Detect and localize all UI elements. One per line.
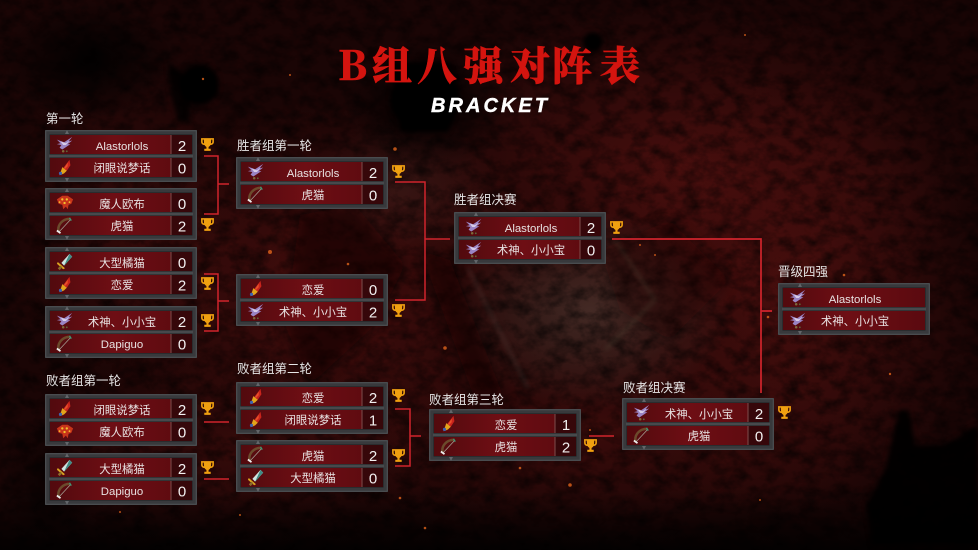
panel: winners final: 0 bbox=[587, 242, 595, 260]
panel: losers round 3: 恋爱 bbox=[495, 418, 517, 432]
panel: losers round 2 match 1: 闭眼说梦话 bbox=[285, 413, 341, 427]
panel: first round match 3 bbox=[45, 247, 197, 299]
heading: 晋级四强: 晋级四强 bbox=[778, 265, 829, 279]
panel: losers round 2 match 2: 大型橘猫 bbox=[290, 471, 336, 485]
panel: first round match 2: 2 bbox=[178, 218, 186, 236]
panel: winners round 1 match 1 bbox=[236, 157, 388, 209]
panel: losers round 2 match 1: 恋爱 bbox=[302, 391, 324, 405]
panel: winners round 1 match 2: 术神、小小宝 bbox=[279, 305, 347, 319]
panel: losers round 2 match 2: 虎猫 bbox=[302, 450, 324, 463]
panel: first round match 1: 2 bbox=[178, 138, 186, 155]
panel: top four: 术神、小小宝 bbox=[821, 314, 889, 328]
panel: losers round 3: 虎猫 bbox=[495, 441, 517, 454]
panel: winners final: 术神、小小宝 bbox=[497, 243, 565, 257]
panel: first round match 1 bbox=[45, 130, 197, 182]
panel: winners round 1 match 1: Alastorlols bbox=[287, 168, 340, 180]
panel: winners round 1 match 2 bbox=[236, 274, 388, 326]
panel: losers round 2 match 2 bbox=[236, 440, 388, 492]
panel: winners round 1 match 2: 0 bbox=[369, 282, 377, 299]
panel: first round match 2: 0 bbox=[178, 196, 186, 213]
subtitle: BRACKET bbox=[431, 95, 549, 117]
panel: losers final: 2 bbox=[755, 406, 763, 423]
panel: losers round 2 match 1 bbox=[236, 382, 388, 434]
panel: losers final bbox=[622, 398, 774, 450]
panel: losers round 1 match 2: Dapiguo bbox=[101, 486, 143, 498]
panel: losers round 2 match 1: 2 bbox=[369, 390, 377, 407]
panel: losers round 1 match 1: 闭眼说梦话 bbox=[94, 403, 150, 417]
panel: losers round 3 bbox=[429, 409, 581, 461]
panel: losers round 1 match 1 bbox=[45, 394, 197, 446]
panel: losers final: 虎猫 bbox=[688, 430, 710, 443]
panel: losers round 1 match 2: 大型橘猫 bbox=[99, 462, 145, 476]
panel: losers round 2 match 1: 1 bbox=[369, 412, 377, 430]
panel: winners round 1 match 1: 虎猫 bbox=[302, 189, 324, 202]
panel: first round match 3: 0 bbox=[178, 255, 186, 272]
panel: first round match 4 bbox=[45, 306, 197, 358]
panel: first round match 3: 2 bbox=[178, 278, 186, 294]
panel: losers final: 术神、小小宝 bbox=[665, 407, 733, 421]
panel: losers round 3: 2 bbox=[562, 440, 570, 456]
panel: first round match 4: Dapiguo bbox=[101, 339, 143, 351]
panel: first round match 1: 闭眼说梦话 bbox=[94, 161, 150, 175]
panel: first round match 1: 0 bbox=[178, 160, 186, 178]
panel: losers round 1 match 1: 魔人欧布 bbox=[99, 425, 145, 439]
panel: winners round 1 match 2: 恋爱 bbox=[302, 283, 324, 297]
panel: losers round 1 match 2 bbox=[45, 453, 197, 505]
panel: first round match 4: 术神、小小宝 bbox=[88, 315, 156, 329]
panel: first round match 3: 恋爱 bbox=[111, 278, 133, 292]
panel: winners final bbox=[454, 212, 606, 264]
panel: losers round 2 match 2: 2 bbox=[369, 448, 377, 465]
panel: first round match 4: 0 bbox=[178, 336, 186, 354]
panel: top four: Alastorlols bbox=[829, 294, 882, 306]
heading: 败者组第一轮: 败者组第一轮 bbox=[46, 373, 121, 388]
heading: 败者组决赛: 败者组决赛 bbox=[623, 380, 686, 395]
panel: losers round 3: 1 bbox=[562, 417, 570, 434]
heading: 败者组第二轮: 败者组第二轮 bbox=[237, 361, 312, 376]
panel: winners round 1 match 1: 2 bbox=[369, 165, 377, 182]
heading: 第一轮: 第一轮 bbox=[46, 112, 84, 126]
panel: losers round 1 match 2: 0 bbox=[178, 484, 186, 500]
panel: first round match 2: 魔人欧布 bbox=[99, 197, 145, 211]
panel: winners round 1 match 1: 0 bbox=[369, 188, 377, 204]
panel: first round match 2: 虎猫 bbox=[111, 220, 133, 233]
panel: first round match 2 bbox=[45, 188, 197, 240]
panel: top four bbox=[778, 283, 930, 335]
panel: first round match 4: 2 bbox=[178, 314, 186, 331]
panel: losers round 1 match 2: 2 bbox=[178, 461, 186, 478]
sparks bbox=[119, 34, 891, 529]
panel: first round match 3: 大型橘猫 bbox=[99, 256, 145, 270]
icons: winner trophies bbox=[201, 138, 791, 474]
panel: winners final: 2 bbox=[587, 220, 595, 237]
panel: losers round 1 match 1: 2 bbox=[178, 402, 186, 419]
panel: winners final: Alastorlols bbox=[505, 223, 558, 235]
heading: 败者组第三轮: 败者组第三轮 bbox=[429, 392, 504, 407]
heading: 胜者组第一轮: 胜者组第一轮 bbox=[237, 138, 312, 153]
panel: winners round 1 match 2: 2 bbox=[369, 304, 377, 322]
connector lines bbox=[204, 156, 772, 479]
title: B组八强对阵表 bbox=[338, 35, 640, 92]
panel: first round match 1: Alastorlols bbox=[96, 141, 149, 153]
panel: losers round 2 match 2: 0 bbox=[369, 470, 377, 488]
panel: losers round 1 match 1: 0 bbox=[178, 424, 186, 442]
panel: losers final: 0 bbox=[755, 428, 763, 446]
heading: 胜者组决赛: 胜者组决赛 bbox=[454, 192, 517, 207]
